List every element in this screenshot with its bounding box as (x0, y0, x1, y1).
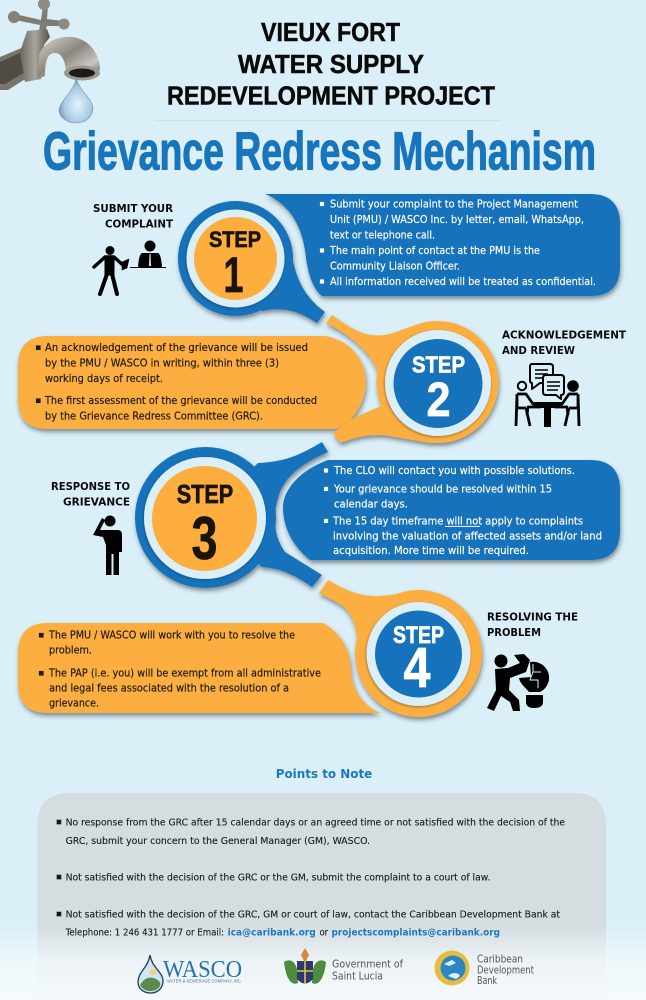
step 4 label: PROBLEM (487, 627, 541, 639)
logo: Caribbean Development Bank (434, 950, 534, 987)
step 2 bullets: working days of receipt. (45, 373, 163, 385)
notes text: GRC, submit your concern to the General Manager (GM), WASCO. (66, 836, 370, 847)
step 1 badge: STEP (209, 227, 261, 252)
icon: person submitting complaint at desk (94, 240, 166, 294)
title: REDEVELOPMENT PROJECT (167, 80, 495, 110)
icon: person on the telephone (93, 516, 122, 575)
step 2 text panel (18, 336, 366, 429)
step 4 text panel (18, 623, 381, 713)
step 3 label: GRIEVANCE (63, 496, 130, 508)
step 4 badge: 4 (404, 636, 431, 700)
step 4 bullets: problem. (49, 644, 92, 656)
panel: step 4 resolving the problem (18, 580, 578, 717)
step 2 bullets (36, 342, 317, 422)
step 1 bullets: Submit your complaint to the Project Management (330, 198, 578, 210)
step 1 text panel (265, 194, 620, 296)
step 2 bullets: The first assessment of the grievance will be conducted (44, 395, 317, 407)
logo: Caribbean Development Bank: Caribbean (477, 954, 523, 966)
step 4 bullets: The PMU / WASCO will work with you to resolve the (48, 630, 295, 642)
logo: WASCO (138, 955, 242, 993)
step 1 bullets: The main point of contact at the PMU is the (329, 245, 540, 257)
step 2 bullets: An acknowledgement of the grievance will be issued (45, 342, 308, 354)
logo: Government of Saint Lucia (284, 948, 403, 984)
step 3 badge: STEP (177, 479, 233, 509)
step 2 badge: 2 (426, 374, 450, 427)
step 3 bullets: acquisition. More time will be required. (333, 545, 529, 557)
notes text: or (320, 928, 329, 938)
step 1 badge (178, 201, 325, 323)
step 4 label (487, 612, 578, 639)
step 3 label (51, 481, 130, 508)
step 1 bullets (320, 198, 596, 288)
step 4 bullets: and legal fees associated with the resolution of a (49, 682, 289, 694)
notes text: Not satisfied with the decision of the GRC or the GM, submit the complaint to a court of law. (66, 872, 490, 884)
step 1 bullets: Community Liaison Officer. (330, 260, 460, 272)
step 2 label (502, 330, 627, 357)
logo: Government of Saint Lucia: Government of (332, 958, 403, 970)
logo: Government of Saint Lucia: Saint Lucia (332, 970, 383, 982)
step 2 label: ACKNOWLEDGEMENT (502, 330, 627, 342)
step 2 label: AND REVIEW (502, 345, 576, 357)
points to note heading: Points to Note (276, 766, 372, 781)
logo: WASCO: WASCO (163, 957, 242, 983)
title: VIEUX FORT (261, 17, 400, 47)
step 3 bullets: The 15 day timeframe will not apply to complaints (332, 516, 583, 528)
notes text: Not satisfied with the decision of the GRC, GM or court of law, contact the Caribbean Development Bank at (66, 910, 560, 920)
step 3 bullets: The CLO will contact you with possible solutions. (333, 465, 575, 477)
step 1 badge: 1 (224, 247, 244, 303)
step 4 label: RESOLVING THE (487, 612, 578, 624)
step 1 label (93, 203, 174, 230)
notes text: projectscomplaints@caribank.org (332, 928, 500, 938)
title: WATER SUPPLY (238, 49, 424, 79)
step 2 badge (326, 315, 498, 443)
step 3 bullets (324, 465, 602, 557)
step 3 bullets: Your grievance should be resolved within 15 (333, 484, 552, 496)
step 3 bullets: calendar days. (334, 498, 408, 510)
step 1 bullets: text or telephone call. (330, 230, 435, 242)
title (167, 17, 495, 110)
step 3 badge (135, 442, 328, 588)
step 2 bullets: by the PMU / WASCO in writing, within three (3) (45, 358, 279, 370)
panel: step 3 response to grievance (51, 442, 620, 588)
grey notes box (38, 793, 606, 1000)
step 3 badge: 3 (192, 505, 218, 572)
step 4 badge: STEP (393, 622, 444, 649)
step 3 text panel (283, 460, 620, 560)
step 3 bullets: involving the valuation of affected assets and/or land (333, 530, 602, 542)
step 4 badge (319, 580, 482, 717)
icon: dripping faucet (0, 0, 100, 123)
panel: step 1 submit your complaint (93, 194, 620, 323)
logo: Caribbean Development Bank: Development (477, 964, 534, 976)
step 1 bullets: Unit (PMU) / WASCO Inc. by letter, email, WhatsApp, (330, 214, 584, 226)
step 4 bullets: grievance. (49, 698, 99, 710)
logo: WASCO: WATER & SEWERAGE COMPANY, INC. (167, 978, 242, 984)
notes text: ica@caribank.org (228, 928, 316, 938)
logo: Caribbean Development Bank: Bank (477, 975, 497, 987)
panel: points to note (0, 766, 646, 1000)
notes text: Telephone: 1 246 431 1777 or Email: (65, 928, 224, 938)
panel: step 2 acknowledgement and review (18, 315, 627, 443)
step 1 bullets: All information received will be treated as confidential. (330, 276, 596, 288)
icon: two people talking at a table (516, 364, 579, 427)
step 4 bullets: The PAP (i.e. you) will be exempt from all administrative (48, 668, 321, 680)
notes text: No response from the GRC after 15 calendar days or an agreed time or not satisfied with the decision of the (66, 818, 565, 828)
step 2 bullets: by the Grievance Redress Committee (GRC). (45, 410, 263, 422)
step 2 badge: STEP (412, 352, 465, 378)
step 3 label: RESPONSE TO (51, 481, 130, 493)
step 1 label: COMPLAINT (105, 218, 174, 230)
step 1 label: SUBMIT YOUR (93, 203, 173, 215)
icon: person fitting puzzle piece into light bulb (487, 654, 549, 711)
notes text (57, 818, 565, 938)
step 4 bullets (39, 630, 321, 710)
